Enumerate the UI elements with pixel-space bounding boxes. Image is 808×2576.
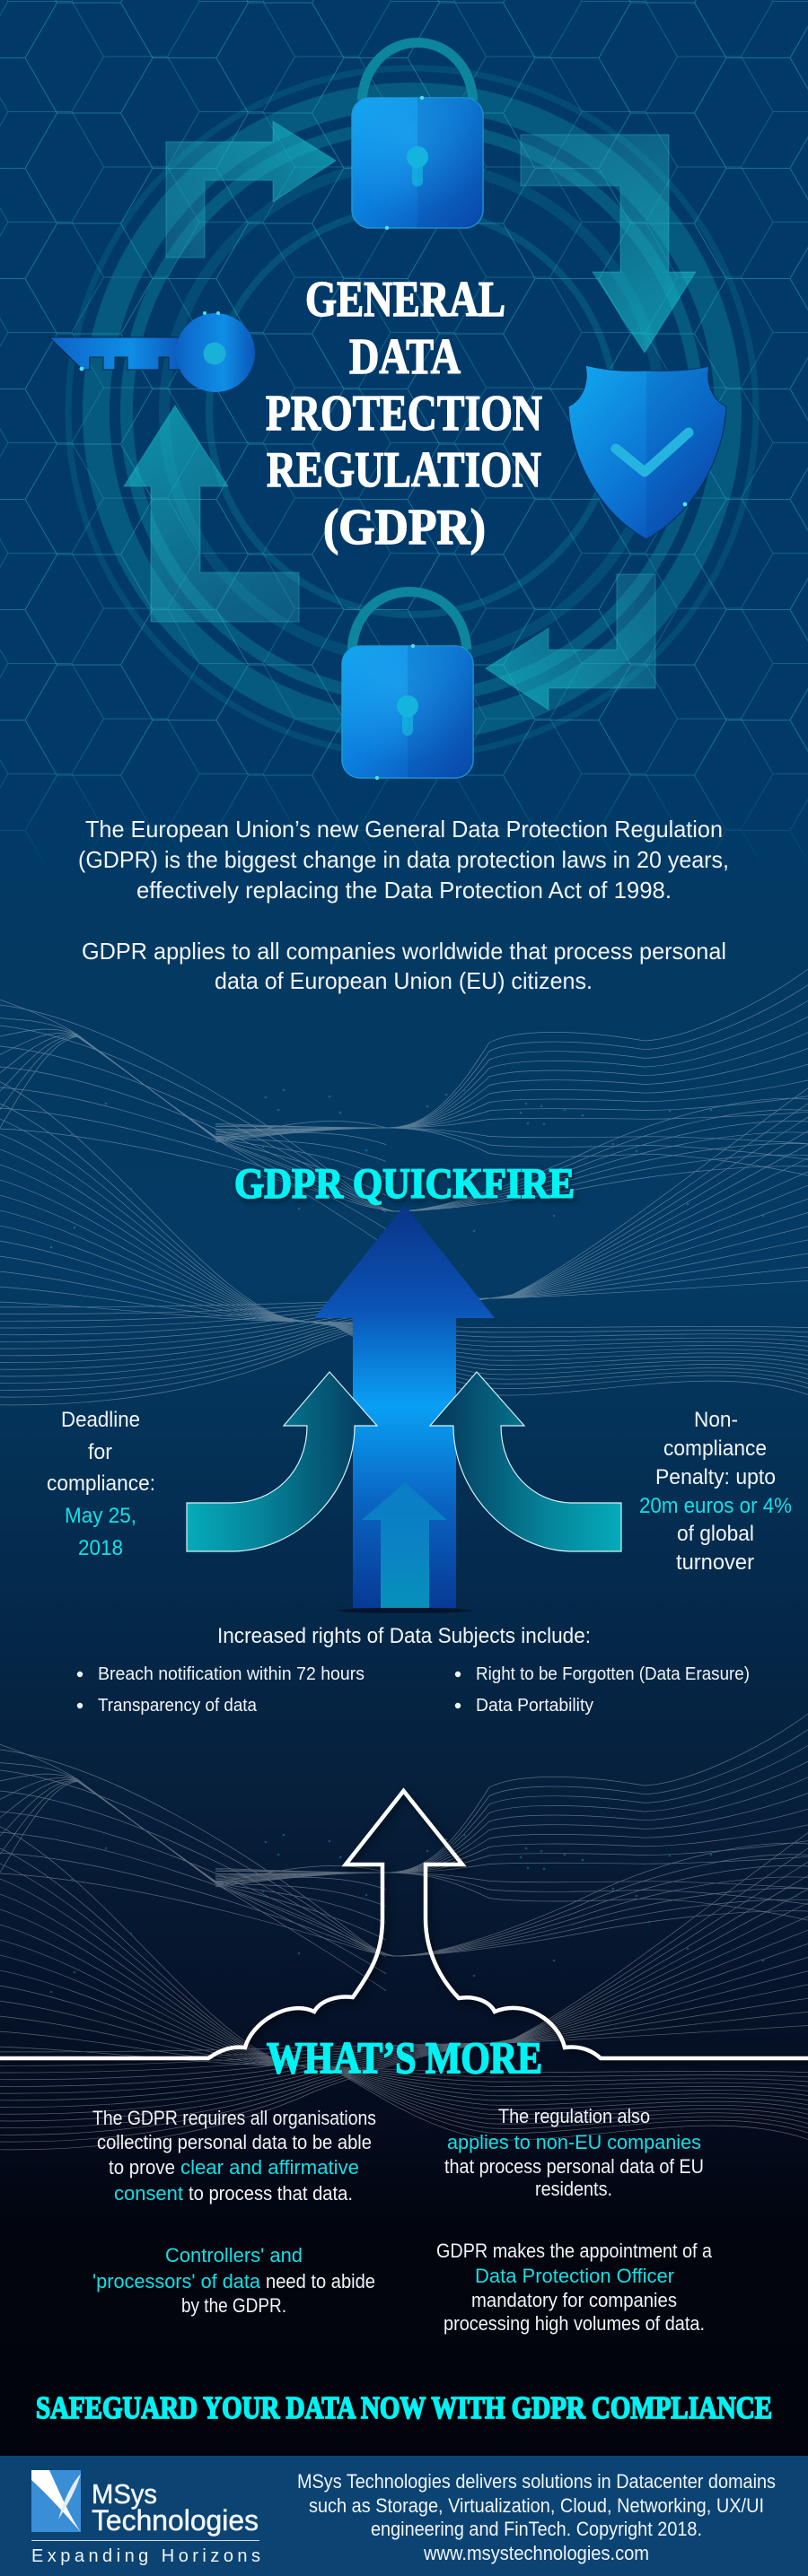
text block: data protection officer: GDPR makes the appointment of a xyxy=(436,2240,713,2262)
text block: controllers and processors: Controllers' and xyxy=(165,2244,303,2266)
intro text: The European Union’s new General Data Protection Regulation xyxy=(85,816,723,843)
right callout: penalty: of global xyxy=(677,1522,754,1546)
arrow: top left xyxy=(166,121,336,258)
rights of data subjects list: Increased rights of Data Subjects include: xyxy=(217,1624,591,1648)
text block: affirmative consent: consent xyxy=(114,2182,183,2205)
company blurb: www.msystechnologies.com xyxy=(423,2542,649,2564)
text block: controllers and processors: by the GDPR. xyxy=(181,2294,286,2317)
wave lines: what's more section xyxy=(0,1579,808,2166)
hero cycle diagram xyxy=(49,43,756,780)
wave lines: quickfire section xyxy=(0,834,808,1421)
concentric rings xyxy=(68,68,756,755)
rights of data subjects list: Data Portability xyxy=(476,1696,593,1716)
company blurb xyxy=(297,2470,776,2564)
title: (GDPR) xyxy=(323,500,486,555)
left callout: deadline xyxy=(47,1408,155,1560)
title: GENERAL xyxy=(305,272,505,327)
right callout: penalty xyxy=(639,1408,792,1575)
right callout: penalty: Non- xyxy=(694,1408,738,1432)
title: PROTECTION xyxy=(266,386,542,441)
text block: affirmative consent xyxy=(92,2107,376,2205)
text block: data protection officer xyxy=(436,2240,713,2335)
text block: affirmative consent: clear and affirmative xyxy=(180,2156,359,2179)
right callout: penalty: compliance xyxy=(663,1436,767,1461)
icon: top padlock xyxy=(352,43,483,230)
logo: Expanding Horizons xyxy=(31,2546,260,2566)
logo: Technologies xyxy=(92,2504,259,2537)
text block: affirmative consent: collecting personal data to be able xyxy=(97,2131,372,2153)
intro text: GDPR applies to all companies worldwide that process personal xyxy=(82,938,726,965)
icon: key xyxy=(49,311,255,392)
curved arrow: left xyxy=(187,1372,377,1551)
company blurb: such as Storage, Virtualization, Cloud, Networking, UX/UI xyxy=(309,2494,764,2517)
text block: affirmative consent: The GDPR requires all organisations xyxy=(92,2107,376,2129)
title: REGULATION xyxy=(267,442,541,498)
small inner arrow xyxy=(362,1482,447,1608)
right callout: penalty: turnover xyxy=(676,1550,754,1575)
text block: data protection officer: processing high volumes of data. xyxy=(444,2312,705,2335)
left callout: deadline: for xyxy=(88,1440,112,1464)
arrow: bottom right xyxy=(486,574,655,710)
title xyxy=(266,272,542,555)
intro text xyxy=(78,816,729,994)
logo: MSys xyxy=(92,2478,157,2510)
big upward arrow xyxy=(314,1205,495,1608)
company blurb: engineering and FinTech. Copyright 2018. xyxy=(371,2518,702,2540)
text block: non-EU companies: The regulation also xyxy=(498,2105,650,2127)
ground shadow xyxy=(338,1608,472,1613)
text block: affirmative consent: to process that data. xyxy=(189,2182,353,2205)
text block: affirmative consent: to prove xyxy=(109,2156,175,2179)
left callout: deadline: Deadline xyxy=(61,1408,140,1432)
hexagon background pattern xyxy=(0,0,808,879)
text block: controllers and processors: need to abide xyxy=(266,2270,375,2292)
text block: controllers and processors: 'processors' of data xyxy=(92,2270,261,2292)
intro text: data of European Union (EU) citizens. xyxy=(215,967,593,994)
left callout: deadline: compliance: xyxy=(47,1471,155,1496)
intro text: effectively replacing the Data Protection Act of 1998. xyxy=(136,877,672,904)
text block: non-EU companies: that process personal data of EU xyxy=(444,2155,704,2178)
arrow: bottom left xyxy=(124,406,299,622)
right callout: penalty: 20m euros or 4% xyxy=(639,1494,792,1518)
white outline arrow and cloud xyxy=(0,1791,808,2058)
text block: non-EU companies: residents. xyxy=(535,2178,612,2200)
text block: data protection officer: mandatory for companies xyxy=(471,2289,677,2311)
title: DATA xyxy=(349,329,461,385)
rights of data subjects list xyxy=(77,1624,750,1716)
heading: GDPR Quickfire: GDPR QUICKFIRE xyxy=(234,1160,575,1208)
rights of data subjects list: Right to be Forgotten (Data Erasure) xyxy=(476,1664,750,1684)
text block: non-EU companies: applies to non-EU companies xyxy=(447,2131,701,2153)
heading: What's more: WHAT’S MORE xyxy=(267,2032,542,2083)
rights of data subjects list: Transparency of data xyxy=(98,1696,258,1716)
icon: shield xyxy=(568,365,726,539)
right callout: penalty: Penalty: upto xyxy=(655,1465,776,1489)
intro text: (GDPR) is the biggest change in data protection laws in 20 years, xyxy=(78,846,729,873)
quickfire arrow diagram xyxy=(187,1205,621,1613)
text block: controllers and processors xyxy=(92,2244,375,2317)
left callout: deadline: 2018 xyxy=(78,1536,123,1560)
rights of data subjects list: Breach notification within 72 hours xyxy=(98,1664,364,1684)
logo xyxy=(31,2470,260,2566)
text block: data protection officer: Data Protection Officer xyxy=(475,2265,674,2287)
footer band xyxy=(0,2456,808,2576)
icon: bottom padlock xyxy=(342,592,473,780)
text block: non-EU companies xyxy=(444,2105,704,2200)
left callout: deadline: May 25, xyxy=(65,1504,136,1528)
arrow: top right xyxy=(521,135,696,353)
curved arrow: right xyxy=(430,1372,621,1551)
